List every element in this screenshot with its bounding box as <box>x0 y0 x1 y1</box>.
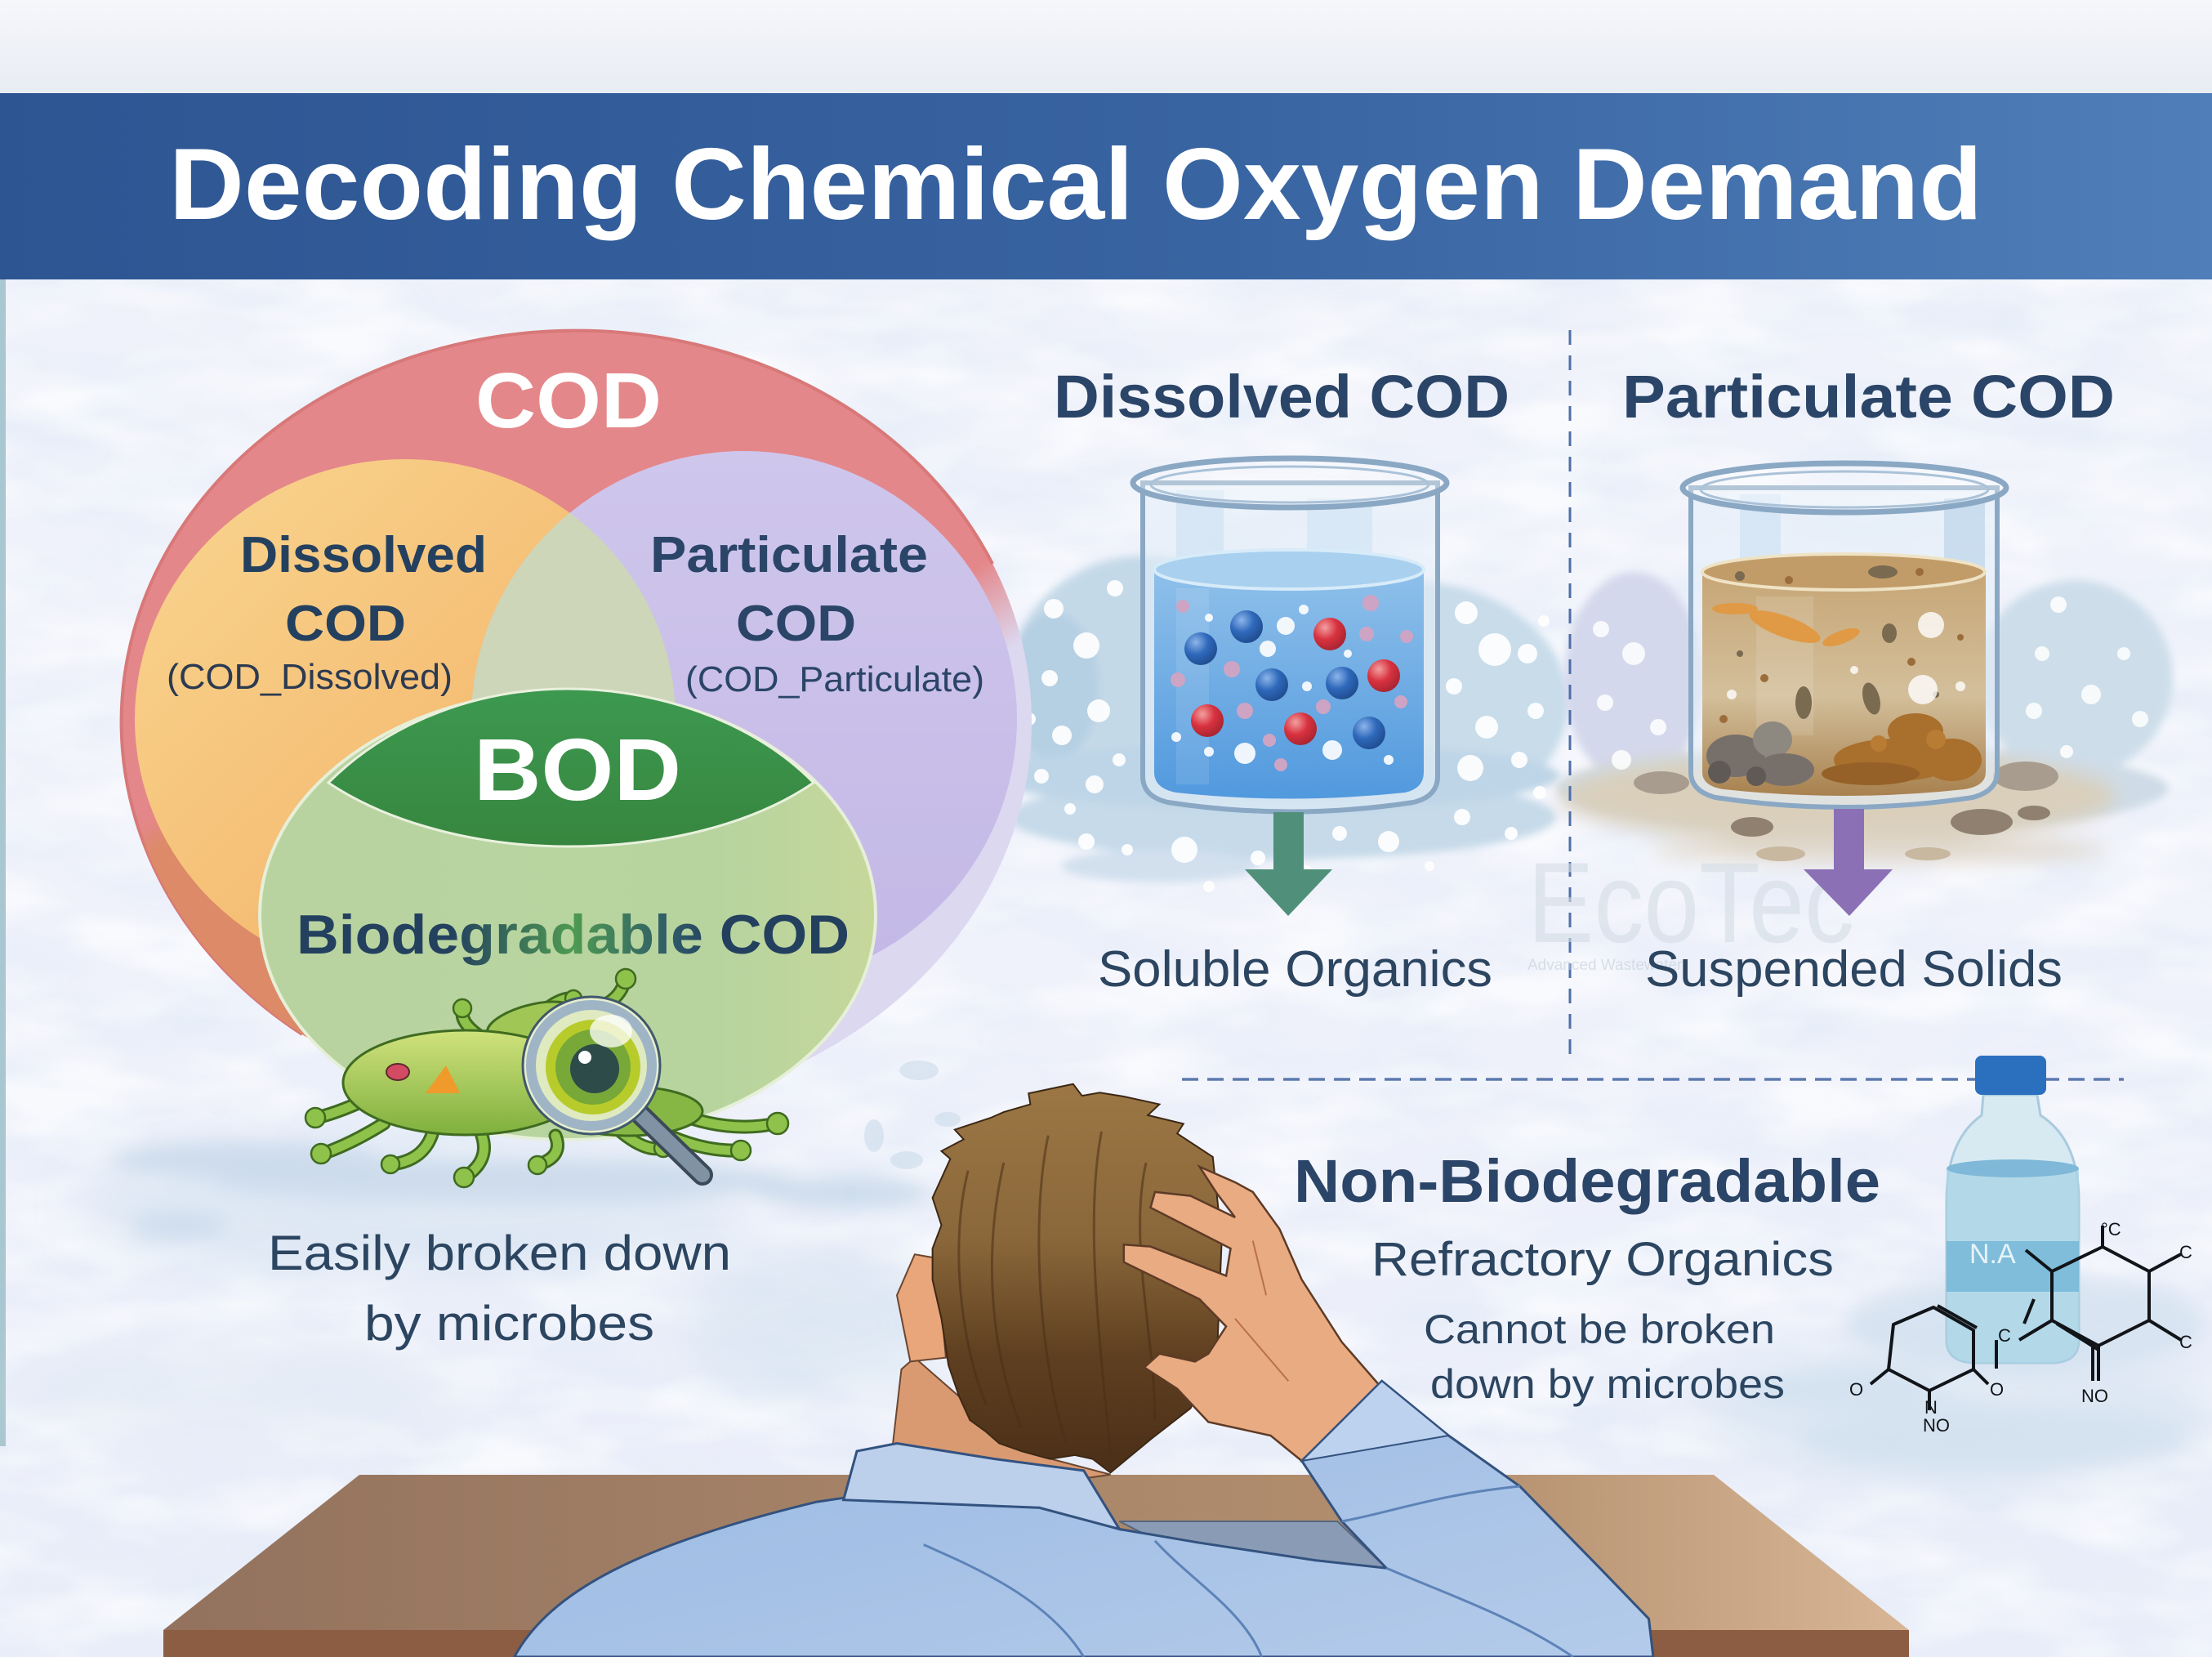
label: suspended solids: Suspended Solids <box>1645 941 2063 998</box>
bottle label text: N.A <box>1969 1239 2016 1270</box>
title: Decoding Chemical Oxygen Demand <box>169 128 1982 241</box>
biodegradable COD label: Biodegradable COD <box>297 904 850 966</box>
particulate COD region <box>471 451 1017 987</box>
icon: chemical structure: NO <box>1923 1415 1950 1436</box>
red molecules <box>1191 618 1400 745</box>
white bubbles <box>1171 605 1394 765</box>
particulate COD label: (COD_Particulate) <box>685 659 984 699</box>
particulate COD label <box>650 527 984 699</box>
COD outer circle <box>122 331 1032 1114</box>
icon: chemical structure: C <box>2179 1242 2192 1262</box>
vertical divider <box>1568 330 1572 1061</box>
icon: microbe with magnifying glass <box>305 969 788 1187</box>
sediment: grey stones <box>1706 721 1814 786</box>
description: cannot be broken down: Cannot be broken <box>1424 1306 1775 1352</box>
icon: chemical structure: C <box>2179 1332 2192 1352</box>
label: soluble organics: Soluble Organics <box>1098 941 1492 998</box>
BOD label: BOD <box>474 720 681 819</box>
microbe body <box>343 1030 588 1135</box>
beaker rim <box>1133 458 1447 507</box>
horizontal divider <box>1182 1078 2124 1081</box>
ear <box>897 1254 946 1361</box>
BOD dark band <box>328 689 814 846</box>
icon: chemical structure: N <box>1924 1397 1938 1418</box>
top white band <box>0 0 2212 93</box>
header banner <box>0 93 2212 279</box>
magnifying glass lens with eye <box>523 997 660 1134</box>
watercolor water background <box>16 1144 2212 1487</box>
blue water <box>1154 569 1424 799</box>
desk <box>163 1475 1909 1657</box>
icon: plastic bottle <box>1947 1056 2079 1363</box>
water patch behind refractory organics <box>1748 1275 2205 1471</box>
magnifying glass handle <box>641 1115 702 1175</box>
water patch behind dissolved beaker <box>988 556 1568 892</box>
seeds and grit <box>1719 565 1964 723</box>
shirt folds <box>924 1486 1573 1657</box>
orange particles <box>1712 603 1862 650</box>
dissolved COD label: COD <box>285 596 406 652</box>
caption: BOD microbes: Easily broken down <box>268 1226 731 1280</box>
overlap lens <box>472 513 675 703</box>
dissolved COD label: Dissolved <box>240 527 487 583</box>
icon: chemical structure: NO <box>2081 1386 2108 1406</box>
dissolved COD label: (COD_Dissolved) <box>167 657 453 697</box>
outer circle red edge <box>122 331 992 1034</box>
knuckle lines <box>1235 1240 1288 1381</box>
bottle cap <box>1975 1056 2046 1095</box>
icon: chemical structure: °C <box>2101 1219 2121 1239</box>
venn diagram: COD <box>98 331 1032 1140</box>
microbe mouth <box>386 1064 409 1080</box>
water splash under microbe <box>106 1061 979 1237</box>
watermark: EcoTec <box>1527 838 1854 967</box>
hair <box>933 1084 1222 1472</box>
arrow: particulate <box>1804 809 1893 916</box>
microbe orange nucleus <box>426 1065 460 1093</box>
icon: chemical structure <box>1849 1219 2192 1436</box>
watermark: Advanced Wastewater <box>1527 957 1683 974</box>
left edge strip <box>0 279 6 1446</box>
BOD circle <box>260 690 876 1140</box>
icon: chemical structure: O <box>1849 1379 1863 1400</box>
shirt sleeve cuff <box>1302 1381 1448 1461</box>
icon: dissolved beaker <box>1133 458 1447 812</box>
muddy liquid <box>1702 572 1986 796</box>
COD label: COD <box>475 357 662 444</box>
small pink molecules <box>1171 595 1413 771</box>
heading: particulate COD: Particulate COD <box>1622 363 2115 431</box>
outer circle darker lower-left <box>143 824 307 1038</box>
icon: chemical structure: C <box>1998 1325 2011 1346</box>
blue molecules <box>1184 610 1385 749</box>
dissolved COD label <box>167 527 487 697</box>
beaker rim <box>1683 463 2006 512</box>
neck <box>893 1358 1110 1478</box>
shirt collar <box>844 1444 1119 1529</box>
heading: non-biodegradable: Non-Biodegradable <box>1294 1147 1880 1215</box>
debris and water patch behind particulate beaker <box>1556 572 2173 863</box>
man at desk, seen from behind <box>515 1084 1653 1657</box>
caption: BOD microbes <box>268 1226 731 1351</box>
icon: chemical structure: O <box>1990 1379 2004 1400</box>
shirt <box>515 1381 1653 1657</box>
particulate COD label: COD <box>736 596 856 652</box>
heading: dissolved COD: Dissolved COD <box>1054 363 1510 431</box>
particulate COD label: Particulate <box>650 527 928 583</box>
description: cannot be broken down: down by microbes <box>1430 1361 1785 1407</box>
caption: BOD microbes: by microbes <box>364 1296 654 1351</box>
icon: particulate beaker <box>1683 463 2006 807</box>
sediment: brown clumps <box>1822 713 1982 785</box>
arrow: dissolved <box>1245 812 1332 916</box>
keyboard <box>1119 1521 1386 1568</box>
dissolved COD region <box>135 459 676 979</box>
hand on head <box>1124 1167 1448 1461</box>
subheading: refractory organics: Refractory Organics <box>1371 1233 1834 1286</box>
description: cannot be broken down <box>1424 1306 1785 1407</box>
hair strands <box>959 1132 1155 1455</box>
